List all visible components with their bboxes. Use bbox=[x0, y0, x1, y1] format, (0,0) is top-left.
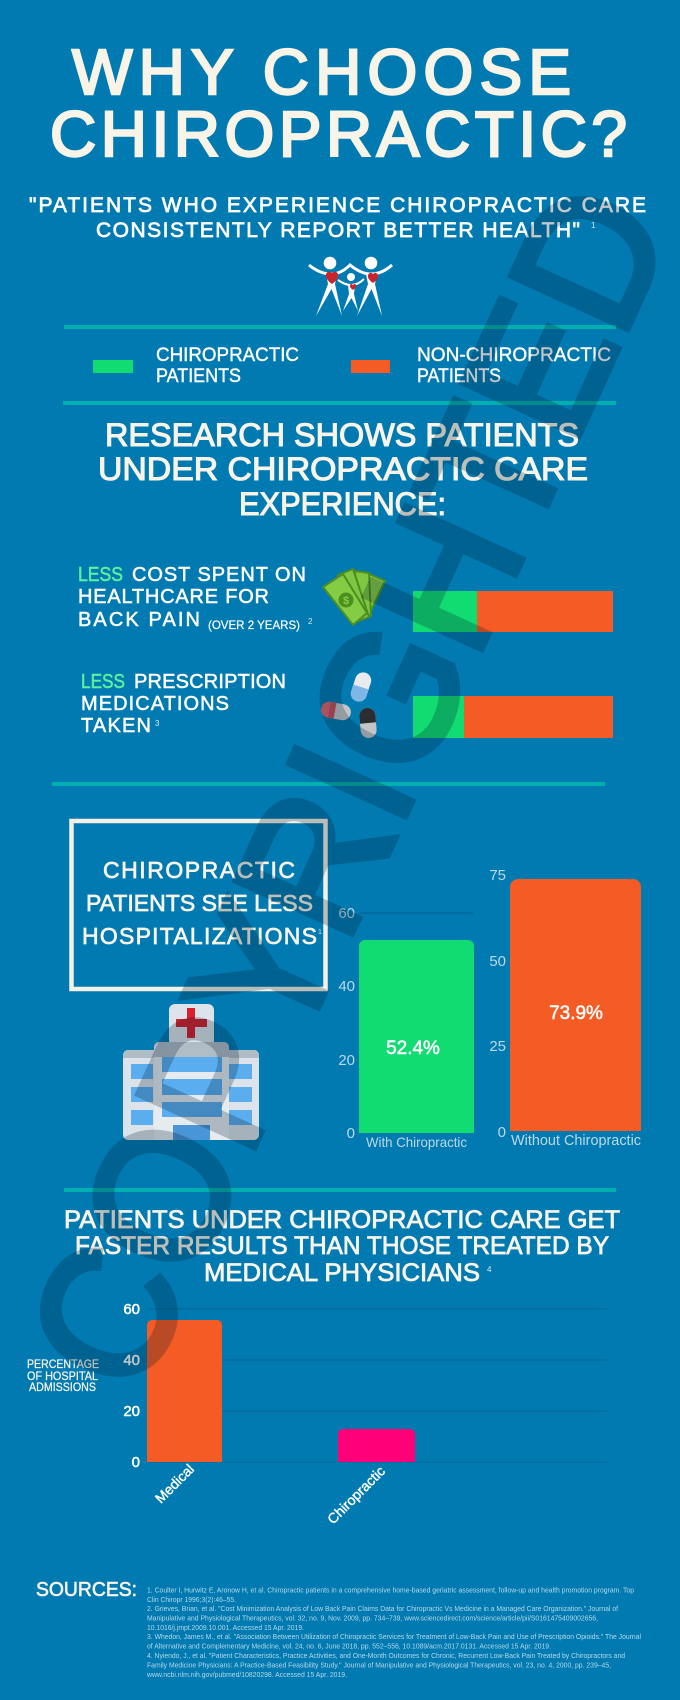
title: CHIROPRACTIC? bbox=[50, 98, 627, 170]
text: less cost: LESS bbox=[78, 564, 123, 586]
chart: hospital admissions bbox=[27, 1301, 607, 1527]
legend label: non-chiropractic: PATIENTS bbox=[417, 366, 501, 387]
y axis labels: 0 bbox=[347, 1125, 355, 1142]
quote: CONSISTENTLY REPORT BETTER HEALTH" bbox=[96, 219, 580, 242]
y axis labels: 40 bbox=[338, 978, 355, 995]
axis title: PERCENTAGE bbox=[27, 1357, 99, 1371]
box heading bbox=[82, 857, 322, 949]
text: less prescription: MEDICATIONS bbox=[81, 693, 229, 715]
text: less cost: HEALTHCARE FOR bbox=[78, 586, 269, 608]
chart: with chiropractic bbox=[338, 905, 474, 1150]
heading: faster results: FASTER RESULTS THAN THOSE TREATED BY bbox=[75, 1232, 609, 1260]
text: less prescription: LESS bbox=[81, 671, 125, 693]
sources list: 3. Whedon, James M., et al. "Association Between Utilization of Chiropractic Services for Treatment of Low-Back Pain and Use of Prescription Opioids." The Journal bbox=[147, 1632, 641, 1641]
bar value: 73.9% bbox=[549, 1003, 603, 1024]
bar value: 52.4% bbox=[386, 1038, 440, 1059]
axis title: ADMISSIONS bbox=[29, 1380, 96, 1394]
bar: medical bbox=[147, 1320, 222, 1462]
text: less prescription: TAKEN bbox=[81, 715, 151, 737]
legend label: non-chiropractic: NON-CHIROPRACTIC bbox=[417, 345, 611, 366]
heading: faster results bbox=[64, 1206, 620, 1287]
divider bbox=[52, 782, 605, 786]
text: less cost bbox=[78, 564, 313, 632]
text: less cost: 2 bbox=[308, 617, 313, 626]
heading: faster results: MEDICAL PHYSICIANS bbox=[204, 1259, 480, 1287]
axis title: OF HOSPITAL bbox=[27, 1369, 98, 1383]
heading: research shows: EXPERIENCE: bbox=[239, 486, 446, 522]
sources list: Family Medicine Physicians: A Practice-Based Feasibility Study." Journal of Manipulative and Physiological Therapeutics, vol. 23, no. 4, 2000, pp. 239–45, bbox=[147, 1660, 611, 1670]
heading: faster results: PATIENTS UNDER CHIROPRACTIC CARE GET bbox=[64, 1206, 620, 1234]
icon: pills bbox=[320, 670, 377, 739]
title bbox=[50, 36, 627, 170]
icon: hospital bbox=[123, 1004, 259, 1140]
sources list bbox=[146, 1586, 641, 1679]
icon: money: $ bbox=[343, 595, 349, 607]
y axis labels: 25 bbox=[489, 1038, 506, 1055]
text: less prescription: 3 bbox=[155, 719, 160, 728]
panel: hospitalizations box bbox=[72, 821, 326, 989]
bar: prescription comparison bbox=[413, 696, 613, 738]
legend swatch: non-chiropractic bbox=[351, 360, 390, 373]
legend label: non-chiropractic bbox=[417, 345, 611, 387]
y axis labels: 20 bbox=[338, 1052, 355, 1069]
bar label: medical: Medical bbox=[152, 1461, 197, 1506]
icon: money bbox=[323, 569, 385, 625]
box heading: PATIENTS SEE LESS bbox=[86, 890, 313, 916]
icon: family with hearts bbox=[309, 257, 392, 316]
text: less cost: BACK PAIN bbox=[78, 609, 200, 631]
x label: With Chiropractic bbox=[366, 1134, 467, 1150]
divider bbox=[64, 1188, 616, 1192]
x label: Without Chiropractic bbox=[511, 1132, 641, 1149]
quote bbox=[29, 194, 646, 242]
heading: research shows: UNDER CHIROPRACTIC CARE bbox=[98, 451, 588, 487]
bar label: chiropractic: Chiropractic bbox=[324, 1463, 388, 1527]
y axis labels: 60 bbox=[338, 905, 355, 922]
y axis labels: 50 bbox=[489, 953, 506, 970]
legend label: chiropractic: CHIROPRACTIC bbox=[156, 345, 299, 366]
sources list: 4. Nyiendo, J., et al. "Patient Characteristics, Practice Activities, and One-Month Outcomes for Chronic, Recurrent Low-Back Pain Treated by Chiropractors and bbox=[147, 1651, 625, 1660]
box heading: CHIROPRACTIC bbox=[103, 857, 295, 883]
sources list: 1. Coulter I, Hurwitz E, Aronow H, et al. Chiropractic patients in a comprehensive home-based geriatric assessment, follow-up and health promotion program. Top bbox=[147, 1586, 634, 1594]
text: less prescription bbox=[81, 671, 286, 737]
text: less cost: (OVER 2 YEARS) bbox=[208, 618, 300, 632]
sources list: 2. Grieves, Brian, et al. "Cost Minimization Analysis of Low Back Pain Claims Data for Chiropractic Vs Medicine in a Managed Care Organization." Journal of bbox=[147, 1604, 618, 1613]
quote: 1 bbox=[591, 221, 596, 230]
divider bbox=[63, 401, 616, 405]
sources list: of Alternative and Complementary Medicine, vol. 24, no. 6, June 2018, pp. 552–556, 10.1089/acm.2017.0131. Accessed 15 Apr. 2019. bbox=[147, 1642, 551, 1650]
sources heading: SOURCES: bbox=[36, 1579, 137, 1601]
legend swatch: chiropractic bbox=[93, 360, 133, 373]
sources list: www.ncbi.nlm.nih.gov/pubmed/10820298. Accessed 15 Apr. 2019. bbox=[146, 1670, 347, 1679]
y axis labels: 0 bbox=[132, 1454, 140, 1471]
chart: without chiropractic bbox=[489, 867, 641, 1149]
y axis labels: 20 bbox=[123, 1403, 140, 1420]
y axis labels bbox=[338, 905, 355, 1142]
y axis labels: 40 bbox=[123, 1352, 140, 1369]
y axis labels: 75 bbox=[489, 867, 506, 884]
box heading: 1 bbox=[318, 929, 322, 936]
sources list: 10.1016/j.jmpt.2009.10.001. Accessed 15 Apr. 2019. bbox=[147, 1623, 304, 1632]
legend label: chiropractic bbox=[156, 345, 299, 387]
y axis labels bbox=[123, 1301, 140, 1471]
y axis labels: 0 bbox=[498, 1124, 506, 1141]
bar: 52.4% bbox=[359, 940, 474, 1133]
y axis labels bbox=[489, 867, 506, 1141]
legend label: chiropractic: PATIENTS bbox=[156, 366, 241, 387]
heading: research shows bbox=[98, 417, 588, 522]
y axis labels: 60 bbox=[123, 1301, 140, 1318]
sources list: Clin Chiropr 1996;3(2):46–55. bbox=[147, 1595, 236, 1604]
bar: chiropractic bbox=[338, 1429, 415, 1462]
bar: 73.9% bbox=[510, 879, 641, 1131]
sources list: Manipulative and Physiological Therapeutics, vol. 32, no. 9, Nov. 2009, pp. 734–739, www.sciencedirect.com/science/article/pii/S0161475409002656, bbox=[147, 1614, 598, 1622]
heading: research shows: RESEARCH SHOWS PATIENTS bbox=[105, 417, 579, 453]
quote: "PATIENTS WHO EXPERIENCE CHIROPRACTIC CARE bbox=[29, 194, 646, 217]
heading: faster results: 4 bbox=[487, 1265, 492, 1274]
divider bbox=[64, 325, 616, 329]
text: less prescription: PRESCRIPTION bbox=[134, 671, 286, 693]
box heading: HOSPITALIZATIONS bbox=[82, 923, 317, 949]
axis title bbox=[27, 1357, 99, 1394]
bar: cost comparison bbox=[413, 591, 613, 632]
legend bbox=[93, 345, 611, 387]
text: less cost: COST SPENT ON bbox=[132, 564, 306, 586]
title: WHY CHOOSE bbox=[72, 36, 571, 108]
